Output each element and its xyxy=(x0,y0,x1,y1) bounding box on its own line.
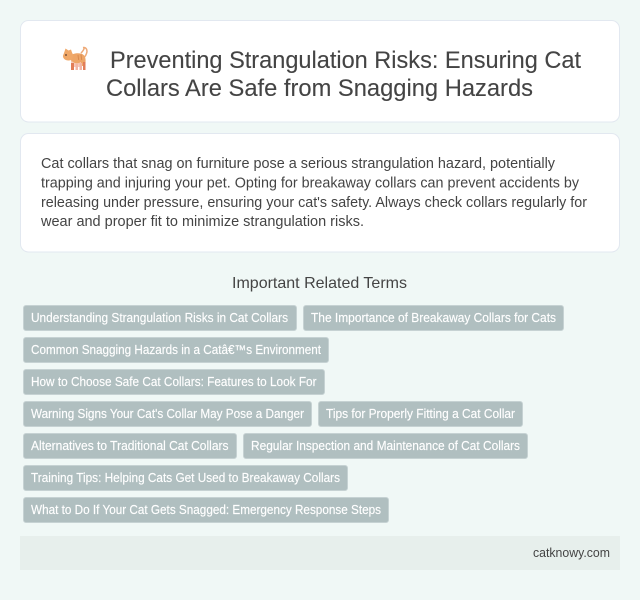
tag: Regular Inspection and Maintenance of Cat Collars xyxy=(251,439,520,453)
description text: wear and proper fit to minimize strangulation risks. xyxy=(40,214,364,230)
description text: Cat collars that snag on furniture pose a serious strangulation hazard, potentially xyxy=(41,156,556,172)
tag: Warning Signs Your Cat's Collar May Pose a Danger xyxy=(31,407,304,421)
tag xyxy=(24,434,236,458)
panel: footer xyxy=(20,536,620,570)
tag: Tips for Properly Fitting a Cat Collar xyxy=(326,407,515,421)
tag xyxy=(24,306,296,330)
description text xyxy=(40,156,587,230)
tag: Understanding Strangulation Risks in Cat Collars xyxy=(31,311,288,325)
tag xyxy=(24,402,312,426)
panel: related term tags xyxy=(24,306,564,522)
tag xyxy=(24,498,388,522)
panel: description card xyxy=(20,134,620,252)
icon: orange cat xyxy=(63,47,87,70)
tag: The Importance of Breakaway Collars for Cats xyxy=(311,311,556,325)
tag xyxy=(24,370,324,394)
tag xyxy=(24,466,348,490)
title xyxy=(106,47,581,102)
tag xyxy=(24,338,328,362)
tag: Common Snagging Hazards in a Catâ€™s Environment xyxy=(31,343,321,357)
tag: Alternatives to Traditional Cat Collars xyxy=(31,439,228,453)
description text: releasing under pressure, ensuring your cat's safety. Always check collars regularly for xyxy=(41,195,587,211)
footer source text: catknowy.com xyxy=(533,545,610,560)
tag xyxy=(244,434,528,458)
heading: related terms: Important Related Terms xyxy=(232,275,407,292)
title: Preventing Strangulation Risks: Ensuring Cat xyxy=(110,47,581,74)
panel: title card xyxy=(20,20,620,122)
tag xyxy=(318,402,522,426)
description text: trapping and injuring your pet. Opting for breakaway collars can prevent accidents by xyxy=(41,176,580,192)
tag: What to Do If Your Cat Gets Snagged: Emergency Response Steps xyxy=(31,503,381,517)
tag: How to Choose Safe Cat Collars: Features to Look For xyxy=(31,375,316,389)
tag: Training Tips: Helping Cats Get Used to Breakaway Collars xyxy=(31,471,340,485)
title: Collars Are Safe from Snagging Hazards xyxy=(106,75,533,102)
tag xyxy=(304,306,564,330)
